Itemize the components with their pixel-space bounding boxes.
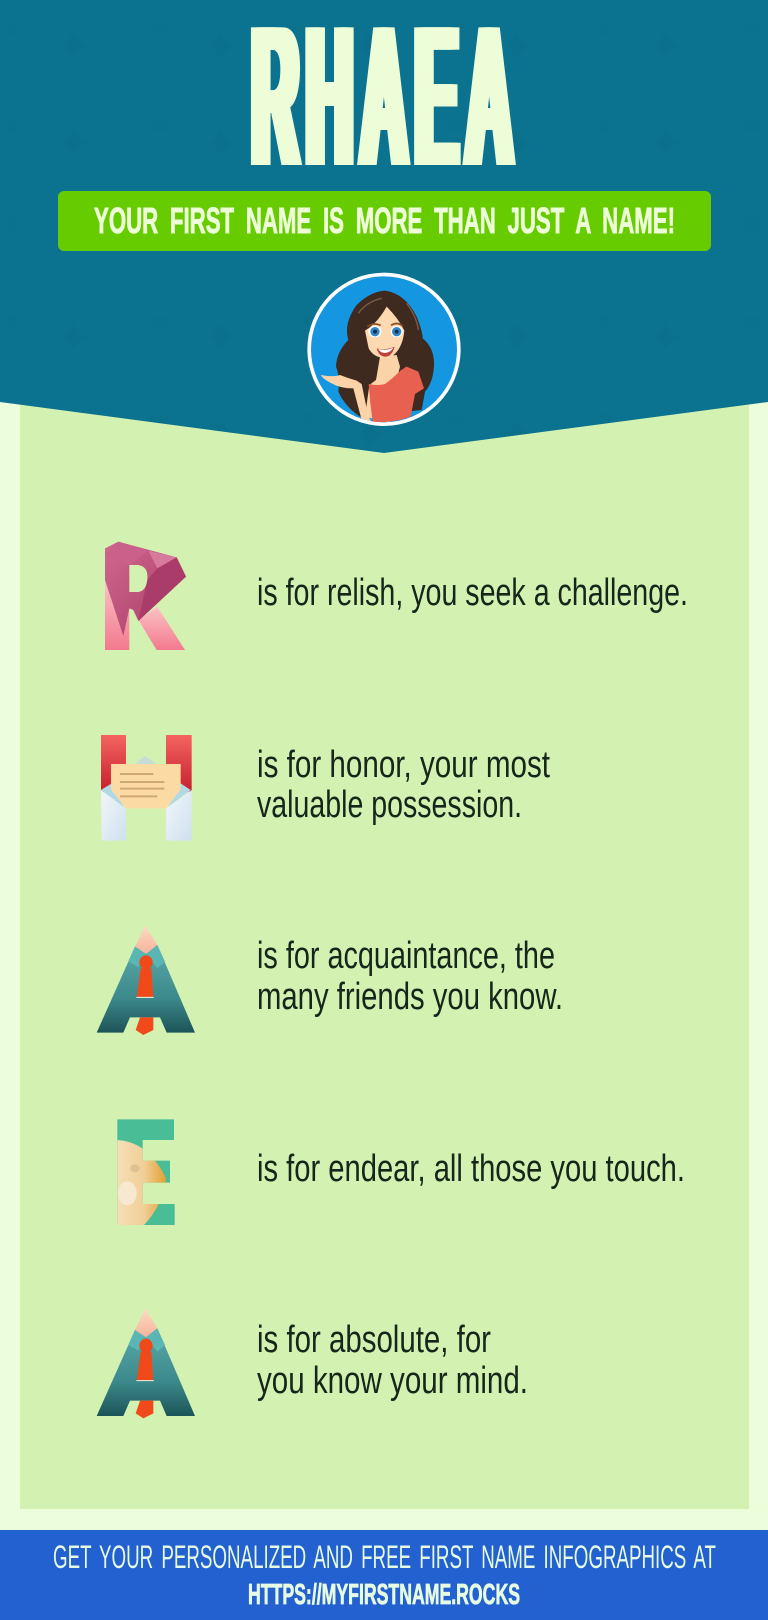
icon: letter E [117, 1119, 175, 1225]
text: first A lines: many friends you know. [257, 976, 563, 1018]
footer url: HTTPS://MYFIRSTNAME.ROCKS [248, 1579, 520, 1611]
icon: letter H [101, 735, 192, 841]
text: second A lines: you know your mind. [257, 1360, 528, 1402]
icon: woman avatar [307, 273, 461, 426]
text: second A lines [257, 1319, 528, 1402]
text: H lines [257, 744, 550, 826]
text: second A lines: is for absolute, for [257, 1319, 491, 1361]
text: first A lines: is for acquaintance, the [257, 935, 555, 977]
panel: content background [20, 400, 749, 1509]
icon: letter A (second) [97, 1308, 195, 1418]
text: H lines: is for honor, your most [257, 744, 550, 786]
banner [58, 191, 711, 251]
header background [0, 0, 768, 453]
text: first A lines [257, 935, 563, 1018]
text: H lines: valuable possession. [257, 784, 522, 826]
footer [0, 1530, 768, 1620]
icon: letter R [105, 542, 186, 650]
icon: letter A (first) [97, 925, 195, 1035]
